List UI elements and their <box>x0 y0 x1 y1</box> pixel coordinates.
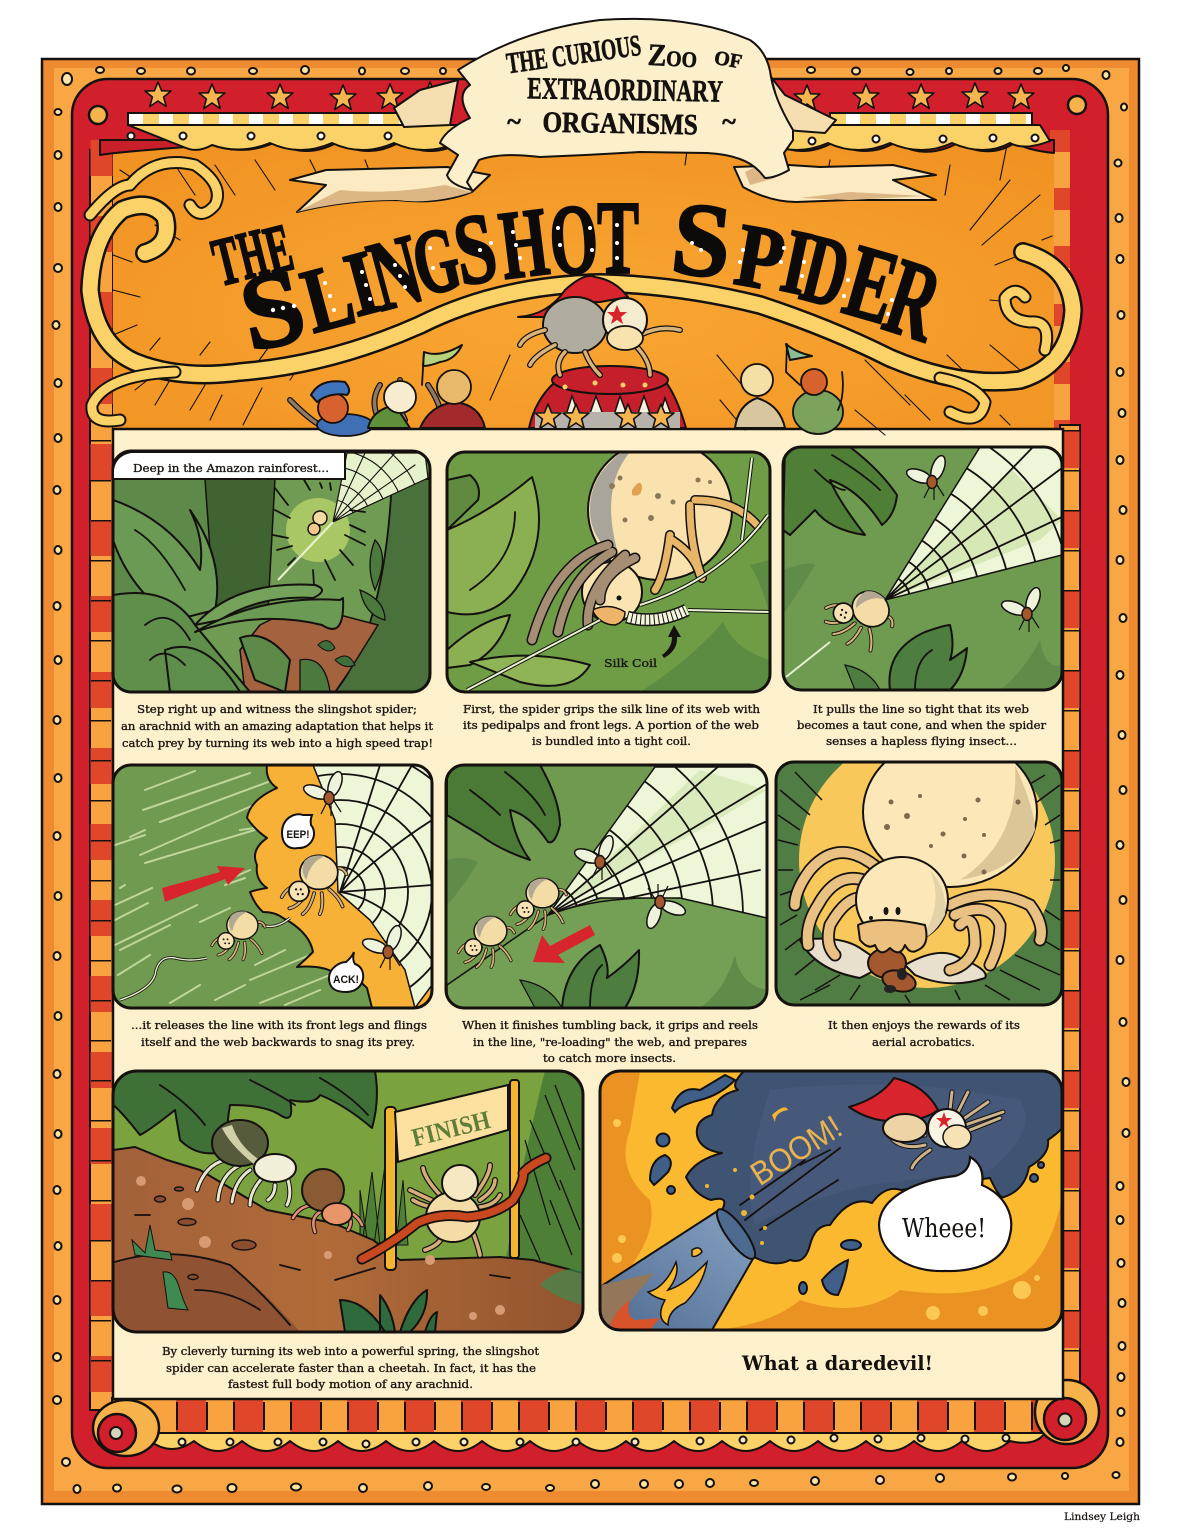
panel 6: head <box>856 857 948 943</box>
panel 8: BOOM flying spider <box>600 1071 1062 1330</box>
panel 3 frame <box>783 447 1062 690</box>
artist credit: Lindsey Leigh <box>1064 1511 1140 1523</box>
header: golden scroll ornament <box>90 162 1073 421</box>
panel 5: hill <box>447 898 767 1008</box>
panel 7: right clump <box>540 1269 583 1305</box>
panel 7: race finish <box>113 1071 583 1332</box>
banner: title text: OF <box>712 47 744 73</box>
panel 5: shadow leaf <box>447 858 767 1008</box>
circus drum pedestal <box>529 366 686 428</box>
panel 8: yellow blast <box>610 1071 1062 1330</box>
caption 2: is bundled into a tight coil. <box>532 734 691 748</box>
caption 2: its pedipalps and front legs. A portion of the web <box>463 718 759 732</box>
main title: The Slingshot Spider: H <box>494 186 554 300</box>
panel 8: lighter smoke <box>750 1084 1026 1225</box>
panel 8: flying spider with cape <box>849 1078 1003 1168</box>
panel 3: flies <box>905 454 1043 632</box>
caption 3: senses a hapless flying insect... <box>826 734 1017 748</box>
caption 3: It pulls the line so tight that its web <box>813 702 1029 716</box>
frame: striped inner columns <box>90 130 1080 1410</box>
caption 4 <box>131 1018 427 1049</box>
banner: lower tails <box>290 167 490 212</box>
panel 7 frame <box>113 1071 583 1332</box>
panel 3: shadow leaves <box>783 563 1062 690</box>
main title: The Slingshot Spider: E <box>833 222 910 347</box>
panel 4: speed lines <box>115 771 330 1005</box>
panel 8: speech bubble <box>879 1157 1011 1271</box>
panel 1: glow rays <box>273 478 365 585</box>
panel 4: ACK bubble <box>329 952 363 992</box>
cream content panel <box>113 429 1063 1399</box>
panel 4: flies <box>302 770 404 970</box>
panel 8: pale dots <box>612 1119 1040 1320</box>
panel 2: brown legs <box>532 545 635 640</box>
frame: bottom yellow scallop <box>150 1433 1045 1451</box>
panel 1 frame <box>113 451 430 692</box>
title dots <box>271 223 894 316</box>
panel 7: foreground plant <box>340 1290 437 1332</box>
main title: The Slingshot Spider: H <box>230 214 275 294</box>
panel 2: silk lines <box>467 458 770 690</box>
banner ribbon <box>290 19 936 212</box>
banner: main scroll <box>440 19 793 190</box>
frame: bottom yellow scallop studs <box>178 1434 1010 1448</box>
panel 1: forest <box>113 432 432 692</box>
caption 7: By cleverly turning its web into a powerful spring, the slingshot <box>162 1344 539 1358</box>
panel 3: spider stretching web <box>784 448 1060 688</box>
panel 8 frame <box>600 1071 1062 1330</box>
main title: The Slingshot Spider: O <box>546 183 602 296</box>
panel 2: silk coil <box>627 610 687 620</box>
panel 8: smoke cloud <box>686 1071 1062 1263</box>
panel 4: release and snag <box>114 766 430 1006</box>
panel 5: spiders <box>458 878 566 967</box>
panel 5: flies <box>573 834 687 930</box>
main title: The Slingshot Spider: T <box>597 180 639 296</box>
caption 1: an arachnid with an amazing adaptation that helps it <box>121 719 433 733</box>
banner: title text: EXTRAORDINARY <box>527 71 723 109</box>
panel 8: speech bubble: Wheee! <box>902 1214 986 1244</box>
panel 8: cannon barrel <box>600 1204 761 1330</box>
frame: bottom-right corner scroll <box>1035 1380 1099 1444</box>
main title: The Slingshot Spider <box>205 178 956 375</box>
main title: The Slingshot Spider: T <box>205 221 248 300</box>
caption 5: When it finishes tumbling back, it grips and reels <box>462 1018 758 1032</box>
top band: corner studs <box>89 96 1086 124</box>
panel 2: head <box>582 562 642 625</box>
panel 1: caption box <box>113 452 345 479</box>
panel 6: enjoying the meal <box>776 732 1062 1005</box>
main title: The Slingshot Spider: S <box>667 178 737 301</box>
top band: yellow scallop <box>128 113 1050 150</box>
panel 6: fly body <box>868 948 918 995</box>
panel 1: trunk right <box>335 479 432 692</box>
panel 1: silk line <box>278 522 333 580</box>
panel 8: BOOM text: BOOM! <box>744 1108 848 1192</box>
closing line: What a daredevil! <box>741 1351 933 1375</box>
caption 5: to catch more insects. <box>543 1051 676 1065</box>
panel 1: trunk left <box>205 479 275 620</box>
caption 1 <box>121 702 433 750</box>
caption 1: Step right up and witness the slingshot spider; <box>137 702 417 716</box>
panel 7: dark spider <box>197 1120 296 1205</box>
frame: bottom-left corner scroll <box>93 1400 159 1456</box>
banner: title text: ZOO <box>647 38 698 75</box>
panel 5: bottom plants <box>520 945 639 1008</box>
panel 8: sparks <box>705 1107 788 1245</box>
caption 4: ...it releases the line with its front legs and flings <box>131 1018 427 1032</box>
panel 4: EEP bubble: EEP! <box>286 829 310 841</box>
panel 4: red arrow <box>162 866 245 902</box>
panel 7: brown spider <box>293 1169 362 1232</box>
banner: title text: ~ <box>507 107 521 136</box>
frame: bottom stripes <box>112 1398 1062 1434</box>
caption 6 <box>828 1018 1020 1049</box>
main title: The Slingshot Spider: G <box>403 206 469 316</box>
main title: The Slingshot Spider: S <box>230 244 315 375</box>
panel 5 frame <box>446 765 767 1008</box>
main title: The Slingshot Spider: I <box>335 231 389 337</box>
caption 7: fastest full body motion of any arachnid. <box>228 1377 473 1391</box>
panel 3: top-left leaf <box>783 447 897 535</box>
panel 4 frame <box>113 765 432 1008</box>
panel 8: speed lines <box>740 1148 840 1230</box>
caption 7 <box>162 1344 539 1391</box>
panel 4: web <box>312 766 430 1006</box>
banner: title text: ORGANISMS <box>542 106 698 141</box>
panel 5: web <box>353 720 767 1110</box>
caption 2 <box>463 702 761 748</box>
audience spiders, left <box>290 345 485 436</box>
caption 6: It then enjoys the rewards of its <box>828 1018 1020 1032</box>
panel 6: spider legs <box>795 852 1041 970</box>
panel 1: web <box>332 452 428 522</box>
main title: The Slingshot Spider: P <box>728 205 792 311</box>
panel 5: top-left leaf <box>447 765 560 860</box>
panel 3: web cone <box>885 448 1060 600</box>
frame: red band <box>72 79 1108 1468</box>
panel 1: glow <box>286 498 350 562</box>
panel 2 frame <box>447 452 770 692</box>
top band: red scallop <box>100 140 1054 155</box>
panel 6: abdomen <box>863 737 1037 887</box>
panel 2: abdomen <box>588 440 732 580</box>
header: light rays <box>113 130 1052 435</box>
banner: upper tails <box>394 80 458 127</box>
caption 4: itself and the web backwards to snag its prey. <box>141 1035 415 1049</box>
caption 3 <box>797 702 1046 748</box>
panel 6: mouthparts <box>858 920 926 952</box>
panel 3: silk line <box>786 642 830 677</box>
top band: stars <box>145 82 1034 110</box>
panel 4: spider at web <box>282 855 346 914</box>
main title: The Slingshot Spider: N <box>358 214 433 333</box>
panel 7: dirt ground <box>113 1147 583 1332</box>
panel 5: reloading <box>353 720 767 1110</box>
main title: The Slingshot Spider: R <box>872 234 956 366</box>
caption 3: becomes a taut cone, and when the spider <box>797 718 1046 732</box>
ringmaster spider with red cape <box>518 276 680 375</box>
panel 4: ACK bubble: ACK! <box>333 974 359 986</box>
panel 4: EEP bubble <box>282 814 314 848</box>
panel 2: spider gripping silk <box>447 440 770 692</box>
panel 4: spider flying <box>212 911 265 960</box>
panel 7: dirt details <box>113 1176 510 1332</box>
panel 7: top foliage <box>113 1071 377 1153</box>
panel 7: cream spider <box>410 1165 500 1255</box>
panel 4: silk trailing <box>120 918 290 1000</box>
panel 4: yellow burst <box>247 765 432 1008</box>
panel 5: red arrow <box>533 925 595 963</box>
panel 7: finish sign: FINISH <box>409 1105 493 1152</box>
panel 2: silk coil label: Silk Coil <box>604 656 657 670</box>
main title: The Slingshot Spider: I <box>773 210 819 315</box>
banner: title text: THE CURIOUS <box>504 30 643 80</box>
panel 1: soil <box>239 615 380 690</box>
panel 6: radial lines <box>778 772 1060 1003</box>
banner: title text: ~ <box>722 107 736 136</box>
audience spiders, right <box>735 344 843 434</box>
panel 2: arrow <box>662 625 681 658</box>
panel 1: caption box: Deep in the Amazon rainforest... <box>133 461 329 475</box>
panel 1: tiny spiders <box>308 511 327 535</box>
panel 1: large leaves <box>113 500 385 692</box>
panel 7: finish ribbon <box>362 1158 546 1259</box>
panel 2: orange legs <box>655 500 757 590</box>
panel 6: fly wings <box>800 939 986 983</box>
caption 5 <box>462 1018 758 1065</box>
panel 1: background forest <box>114 480 208 594</box>
panel 7: finish sign <box>385 1080 519 1270</box>
header orange background <box>113 140 1054 430</box>
caption 5: in the line, "re-loading" the web, and prepares <box>473 1035 747 1049</box>
banner: title text <box>504 30 744 141</box>
panel 6 frame <box>776 762 1062 1005</box>
main title: The Slingshot Spider: E <box>257 209 300 288</box>
caption 1: catch prey by turning its web into a high speed trap! <box>122 736 433 750</box>
main title: The Slingshot Spider: S <box>446 190 505 307</box>
panel 3: bottom leaf <box>845 625 967 690</box>
panel 8: smoke blobs <box>650 1075 1044 1295</box>
panel 3: spider <box>824 590 894 652</box>
main title: The Slingshot Spider: L <box>292 242 364 353</box>
caption 6: aerial acrobatics. <box>872 1035 975 1049</box>
main title: The Slingshot Spider: D <box>792 214 859 329</box>
caption 2: First, the spider grips the silk line of its web with <box>463 702 761 716</box>
panel 7: grass right <box>360 1071 583 1280</box>
panel 6: yellow disc <box>799 732 1055 988</box>
caption 7: spider can accelerate faster than a cheetah. In fact, it has the <box>166 1361 536 1375</box>
panel 2: left leaves <box>447 475 590 686</box>
panel 2: shadow leaves <box>640 560 770 692</box>
